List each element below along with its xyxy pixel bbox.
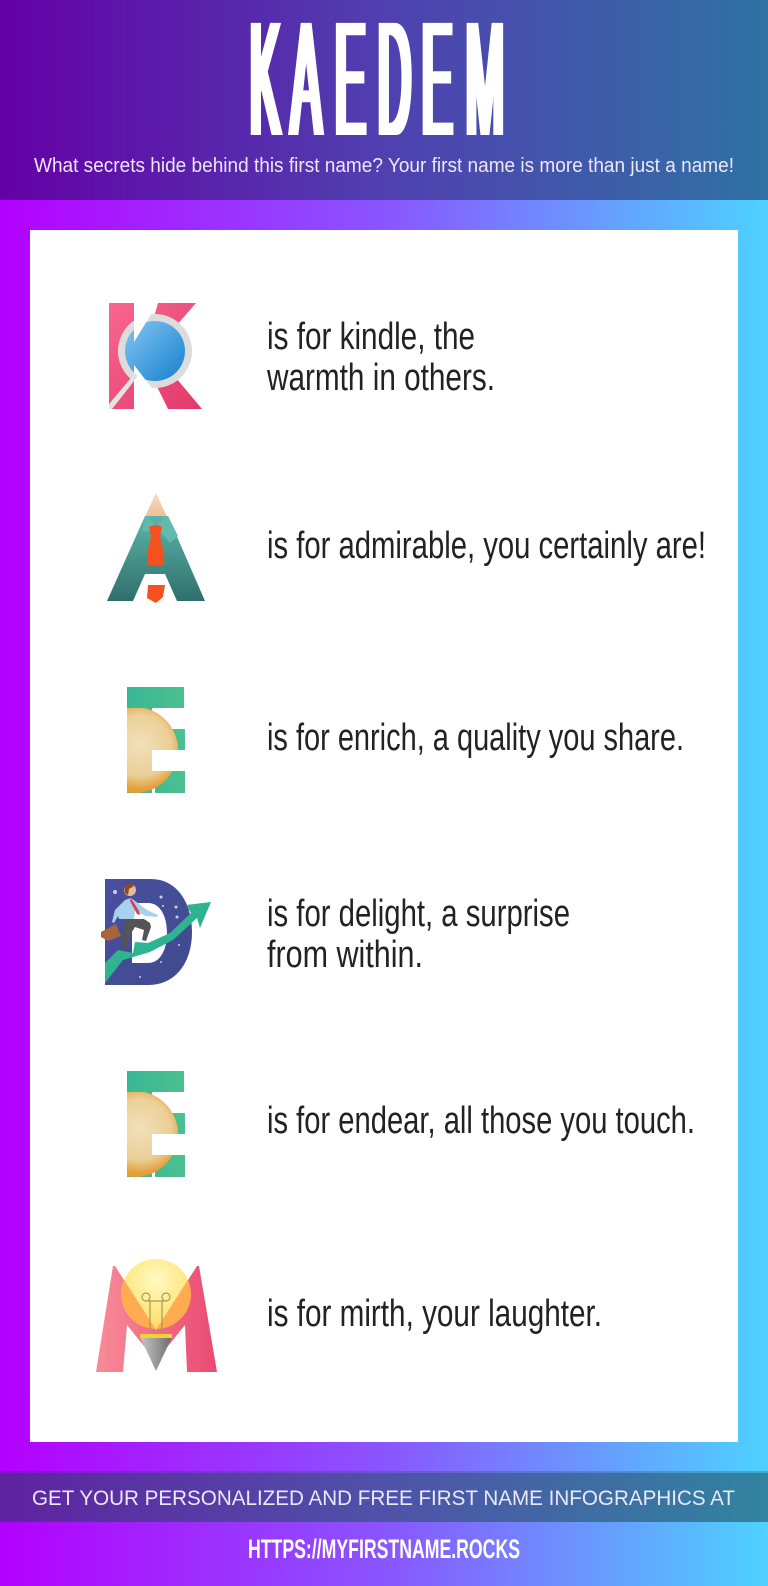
row M: text: is for mirth, your laughter. bbox=[267, 1293, 602, 1335]
row D: text: is for delight, a surprise bbox=[267, 893, 570, 935]
row K: text: warmth in others. bbox=[266, 357, 495, 399]
row E: icon bbox=[127, 687, 185, 793]
footer call to action: GET YOUR PERSONALIZED AND FREE FIRST NAME INFOGRAPHICS AT bbox=[32, 1486, 735, 1510]
row D: icon bbox=[101, 879, 211, 985]
row D: text: from within. bbox=[267, 934, 423, 976]
footer band bbox=[0, 1471, 768, 1522]
row A: icon bbox=[107, 493, 205, 603]
row E second: icon bbox=[127, 1071, 185, 1177]
row K: icon bbox=[109, 303, 202, 409]
row K: text bbox=[266, 316, 495, 399]
footer url: HTTPS://MYFIRSTNAME.ROCKS bbox=[248, 1534, 520, 1564]
row D: text bbox=[267, 893, 570, 976]
row M: icon bbox=[96, 1259, 217, 1372]
header band bbox=[0, 0, 768, 200]
row K: text: is for kindle, the bbox=[267, 316, 475, 358]
white content panel bbox=[30, 230, 738, 1442]
subtitle: What secrets hide behind this first name? Your first name is more than just a name! bbox=[34, 155, 734, 177]
